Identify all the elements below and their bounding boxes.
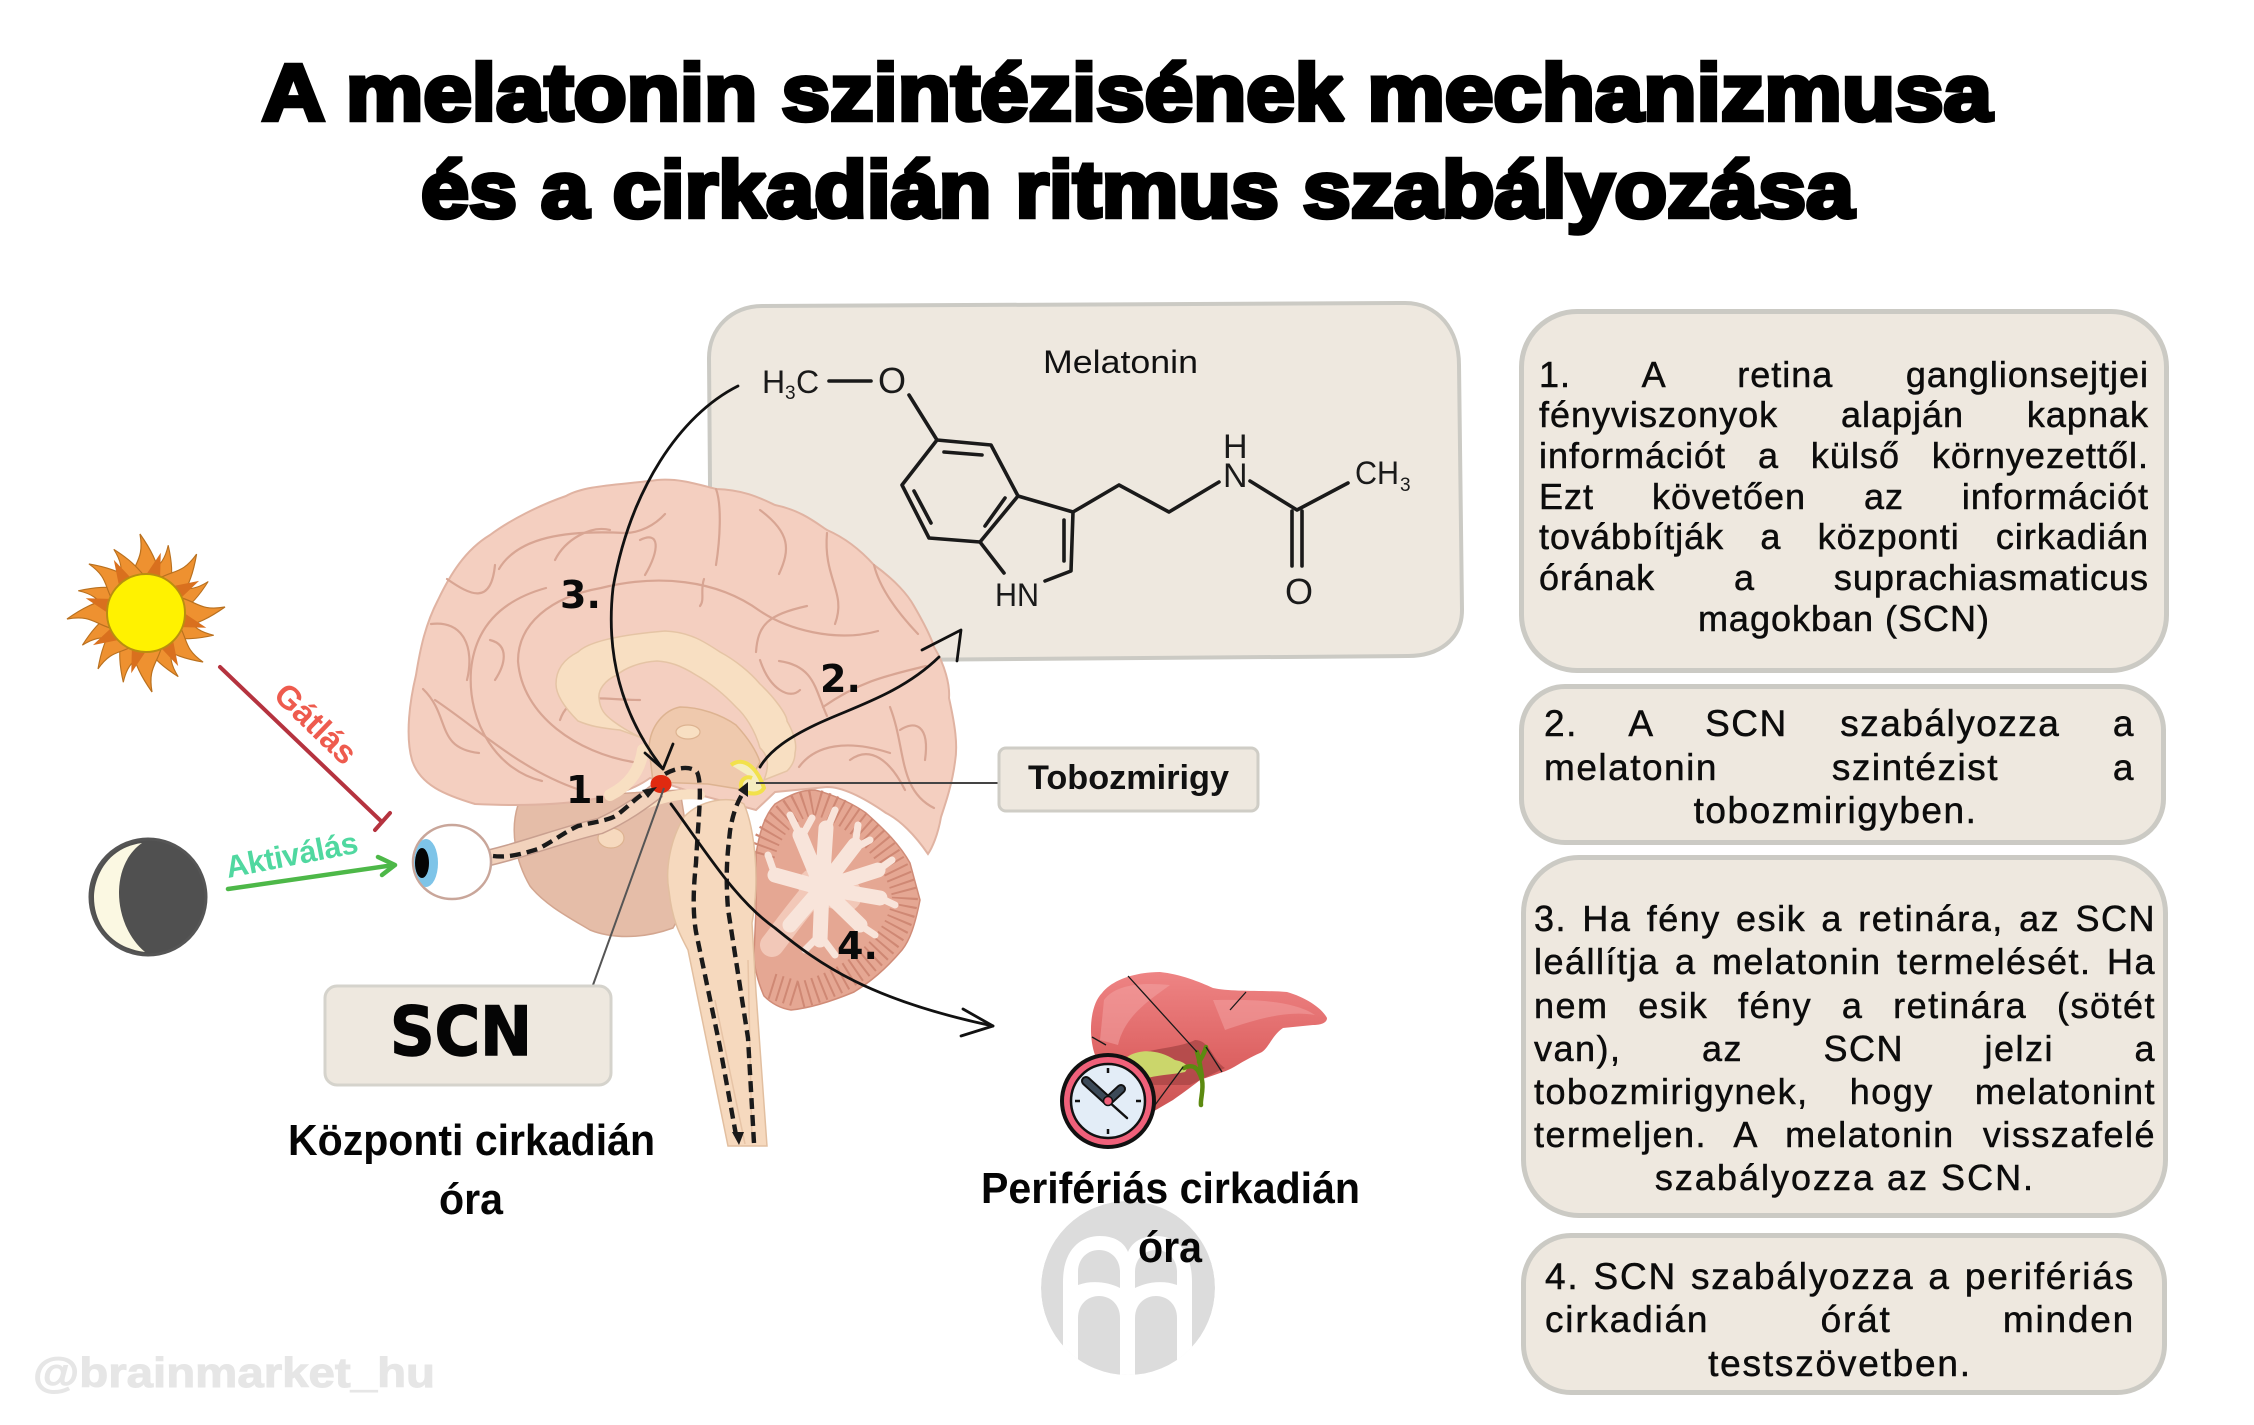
- cerebellar white matter: [768, 810, 895, 955]
- cerebellum: [754, 790, 920, 1010]
- label: Aktiválás: Aktiválás: [223, 825, 361, 885]
- leader line: SCN: [593, 788, 664, 985]
- structural formula: 3: [1400, 475, 1411, 496]
- title: és a cirkadián ritmus szabályozása: [421, 145, 1855, 234]
- panel: step 3 text: nem esik fény a retinára (sötét: [1534, 985, 2156, 1026]
- caption: peripheral clock: Perifériás cirkadián: [981, 1164, 1360, 1213]
- panel: step 2 text: 2. A SCN szabályozza a: [1544, 703, 2135, 744]
- title: [262, 48, 1993, 234]
- panel: step 2 text: tobozmirigyben.: [1694, 790, 1977, 831]
- corpus callosum: [556, 631, 796, 780]
- icon: sun: [67, 534, 225, 692]
- dashed pathways: [493, 768, 754, 1143]
- watermark handle: @brainmarket_hu: [33, 1349, 435, 1396]
- panel: step 3 text: tobozmirigynek, hogy melatonint: [1534, 1071, 2156, 1112]
- panel: melatonin molecule: [709, 303, 1462, 661]
- anatomical leader lines: [1092, 976, 1246, 1105]
- panel: step 3 text: leállítja a melatonin termelését. Ha: [1534, 941, 2156, 982]
- panel: step 1 text: információt a külső környezettől.: [1539, 435, 2149, 476]
- caption: central clock: [288, 1116, 655, 1224]
- panel: step 4 text: testszövetben.: [1708, 1343, 1972, 1384]
- cortical sulci: [423, 489, 934, 808]
- panel: step 3 text: szabályozza az SCN.: [1655, 1157, 2035, 1198]
- thalamus: [649, 707, 760, 790]
- panel: step 4 text: 4. SCN szabályozza a perifériás: [1545, 1256, 2135, 1297]
- icon: clock: [1062, 1055, 1154, 1147]
- step numbers: [560, 573, 878, 968]
- panel: step 1 text: [1519, 309, 2169, 673]
- label: SCN: [325, 986, 611, 1085]
- panel: step 4 text: [1521, 1233, 2167, 1395]
- pineal gland: [731, 762, 764, 794]
- hypothalamic tract and pituitary: [600, 794, 700, 824]
- panel: step 1 text: 1. A retina ganglionsejtjei: [1539, 354, 2149, 395]
- structural formula: N: [1223, 457, 1248, 495]
- watermark logo: [1041, 1201, 1215, 1385]
- structural formula: 3: [785, 383, 796, 404]
- suprachiasmatic nucleus: [650, 775, 672, 793]
- panel: step 3 text: 3. Ha fény esik a retinára, az SCN: [1534, 898, 2156, 939]
- step numbers: 3.: [560, 573, 601, 617]
- structural formula: H: [762, 364, 785, 400]
- illustration: brain sagittal section: [409, 480, 956, 1146]
- structural formula: O: [1285, 571, 1313, 612]
- caption: central clock: óra: [439, 1175, 503, 1224]
- brainstem and spinal cord: [668, 800, 767, 1146]
- structural formula: HN: [995, 577, 1039, 613]
- panel: step 1 text: magokban (SCN): [1698, 598, 1990, 639]
- arrow 4: SCN to peripheral clock: [671, 804, 993, 1036]
- structural formula: O: [878, 360, 906, 401]
- caption: peripheral clock: óra: [1138, 1223, 1202, 1272]
- arrow 3: melatonin feedback to SCN: [611, 386, 738, 769]
- structural formula: CH: [1355, 455, 1399, 491]
- caption: central clock: Központi cirkadián: [288, 1116, 655, 1165]
- cerebrum: [409, 480, 956, 854]
- panel: step 2 text: [1519, 684, 2166, 845]
- icon: liver: [1091, 972, 1327, 1125]
- arrow: activation: [228, 857, 395, 889]
- gallbladder and ducts: [1127, 1051, 1187, 1080]
- temporal lobe: [514, 790, 691, 936]
- label: SCN: SCN: [390, 993, 532, 1072]
- panel: step 1 text: továbbítják a központi cirkadián: [1539, 516, 2149, 557]
- label: Tobozmirigy: [999, 748, 1258, 811]
- structural formula: H: [1223, 428, 1248, 466]
- eye: [413, 825, 491, 899]
- step numbers: 1.: [566, 768, 607, 812]
- panel: step 3 text: van), az SCN jelzi a: [1534, 1028, 2156, 1069]
- heading: Melatonin: Melatonin: [1043, 344, 1198, 380]
- panel: step 1 text: fényviszonyok alapján kapnak: [1539, 394, 2149, 435]
- step numbers: 2.: [820, 657, 861, 701]
- arrow: inhibition: [220, 667, 390, 830]
- structural formula: [762, 360, 1411, 613]
- title: A melatonin szintézisének mechanizmusa: [262, 48, 1993, 137]
- panel: step 2 text: melatonin szintézist a: [1544, 747, 2135, 788]
- structural formula: C: [796, 364, 819, 400]
- optic nerve: [470, 790, 658, 862]
- panel: step 1 text: órának a suprachiasmaticus: [1539, 557, 2149, 598]
- icon: moon: [90, 839, 206, 955]
- panel: step 3 text: [1521, 855, 2168, 1218]
- caption: peripheral clock: [981, 1164, 1360, 1272]
- label: Gátlás: Gátlás: [267, 675, 365, 772]
- step numbers: 4.: [837, 924, 878, 968]
- panel: step 4 text: cirkadián órát minden: [1545, 1299, 2135, 1340]
- leader line: pineal: [756, 782, 998, 784]
- label: Tobozmirigy: Tobozmirigy: [1028, 759, 1229, 797]
- panel: step 1 text: Ezt követően az információt: [1539, 476, 2149, 517]
- arrow 2: SCN to pineal output: [760, 630, 961, 767]
- panel: step 3 text: termeljen. A melatonin visszafelé: [1534, 1114, 2156, 1155]
